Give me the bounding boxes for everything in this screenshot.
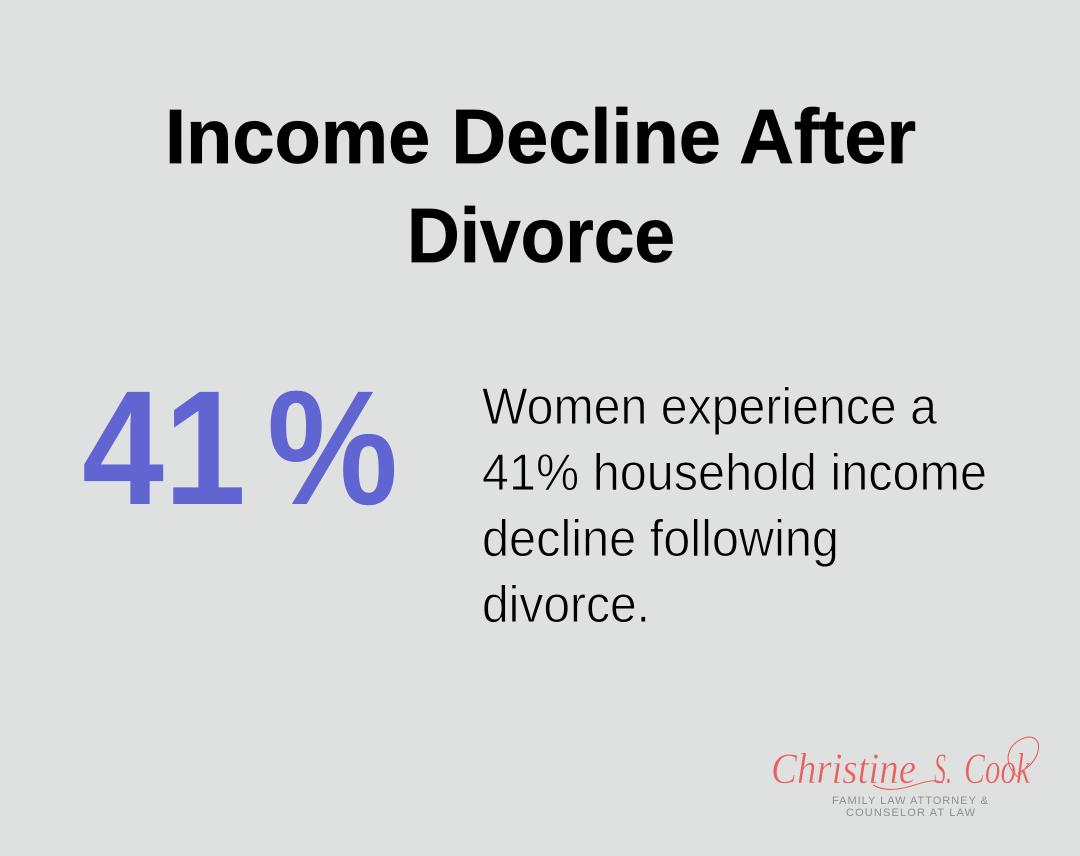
logo name — [771, 746, 1031, 793]
description text — [482, 378, 987, 634]
logo subtitle line 1: FAMILY LAW ATTORNEY & — [832, 795, 989, 807]
description text: Women experience a — [482, 378, 937, 436]
description text: decline following — [482, 510, 839, 568]
description text: 41% household income — [482, 444, 987, 502]
big statistic: 41% — [82, 356, 398, 539]
title: Income Decline After — [165, 94, 916, 180]
title: Divorce — [407, 193, 675, 279]
logo swoosh — [873, 737, 1039, 789]
logo name: Cook — [964, 746, 1031, 793]
logo name: S. — [934, 746, 952, 793]
logo: Christine S. Cook — [771, 737, 1039, 819]
logo subtitle line 2: COUNSELOR AT LAW — [846, 807, 976, 819]
big statistic: 41%: % — [267, 356, 398, 539]
title — [165, 94, 916, 279]
logo name: Christine — [771, 746, 916, 793]
big statistic: 41%: 41 — [82, 356, 246, 539]
description text: divorce. — [482, 576, 650, 634]
